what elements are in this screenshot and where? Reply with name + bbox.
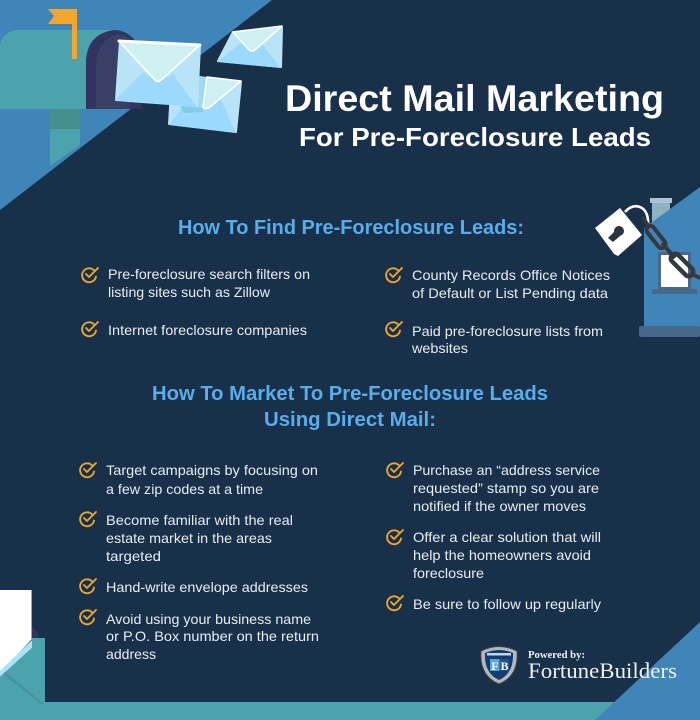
item: purchase stamp: notified if the owner moves (413, 498, 586, 514)
item: avoid business name: or P.O. Box number on the return (106, 628, 319, 644)
list: find leads left (82, 266, 310, 338)
item: target campaigns (80, 462, 318, 497)
item: avoid business name: address (106, 646, 156, 662)
item: clear solution: help the homeowners avoid (413, 547, 591, 563)
icon: envelope, large (115, 41, 200, 107)
item: clear solution: foreclosure (413, 565, 484, 581)
item: clear solution (387, 529, 601, 581)
item: county records: of Default or List Pending data (412, 285, 608, 301)
item: search filters: Pre-foreclosure search filters on (108, 266, 310, 282)
item: county records (386, 267, 610, 301)
bottom teal band (0, 702, 620, 720)
heading: how to find: How To Find Pre-Foreclosure Leads: (178, 216, 524, 239)
item: paid lists (386, 322, 603, 356)
item: become familiar: targeted (106, 548, 161, 564)
heading: how to market (152, 382, 548, 431)
item: hand-write: Hand-write envelope addresses (106, 579, 308, 595)
icon: shield: B (500, 659, 509, 673)
item: purchase stamp: Purchase an “address service (413, 462, 600, 478)
item: search filters: listing sites such as Zillow (108, 284, 271, 300)
icon: envelope, small top right (217, 26, 282, 68)
item: purchase stamp: requested” stamp so you are (413, 480, 599, 496)
item: county records: County Records Office Notices (412, 267, 610, 283)
list: market right (387, 462, 601, 612)
icon: open envelope with letter (0, 590, 45, 705)
item: paid lists: Paid pre-foreclosure lists from (412, 323, 603, 339)
icon: locked house (595, 187, 700, 337)
list: market left (80, 462, 319, 662)
item: paid lists: websites (411, 340, 468, 356)
icon: shield: F (491, 659, 499, 673)
wordmark: FortuneBuilders (528, 658, 677, 683)
item: target campaigns: a few zip codes at a time (106, 481, 263, 497)
list: find leads right (386, 267, 610, 356)
item: clear solution: Offer a clear solution that will (413, 529, 601, 545)
item: become familiar (80, 512, 293, 564)
icon: shield (481, 646, 517, 684)
item: avoid business name: Avoid using your business name (106, 611, 311, 627)
icon: mailbox (0, 9, 142, 166)
logo: FortuneBuilders (481, 646, 677, 684)
item: internet companies: Internet foreclosure companies (108, 322, 307, 338)
powered by: Powered by: (528, 650, 585, 661)
item: search filters (82, 266, 310, 300)
heading: how to market: Using Direct Mail: (264, 408, 436, 431)
item: purchase stamp (387, 462, 600, 514)
item: avoid business name (80, 610, 319, 662)
item: become familiar: Become familiar with the real (106, 512, 293, 528)
title: Direct Mail Marketing (285, 78, 664, 119)
item: become familiar: estate market in the areas (106, 530, 272, 546)
item: follow up: Be sure to follow up regularly (413, 596, 601, 612)
title: For Pre-Foreclosure Leads (299, 122, 651, 152)
icon: envelope, middle (169, 74, 241, 133)
top-left blue triangle (0, 0, 272, 210)
title (285, 78, 664, 152)
heading: how to market: How To Market To Pre-Foreclosure Leads (152, 382, 548, 405)
bottom-right blue triangle (595, 622, 700, 720)
item: target campaigns: Target campaigns by focusing on (106, 462, 318, 478)
